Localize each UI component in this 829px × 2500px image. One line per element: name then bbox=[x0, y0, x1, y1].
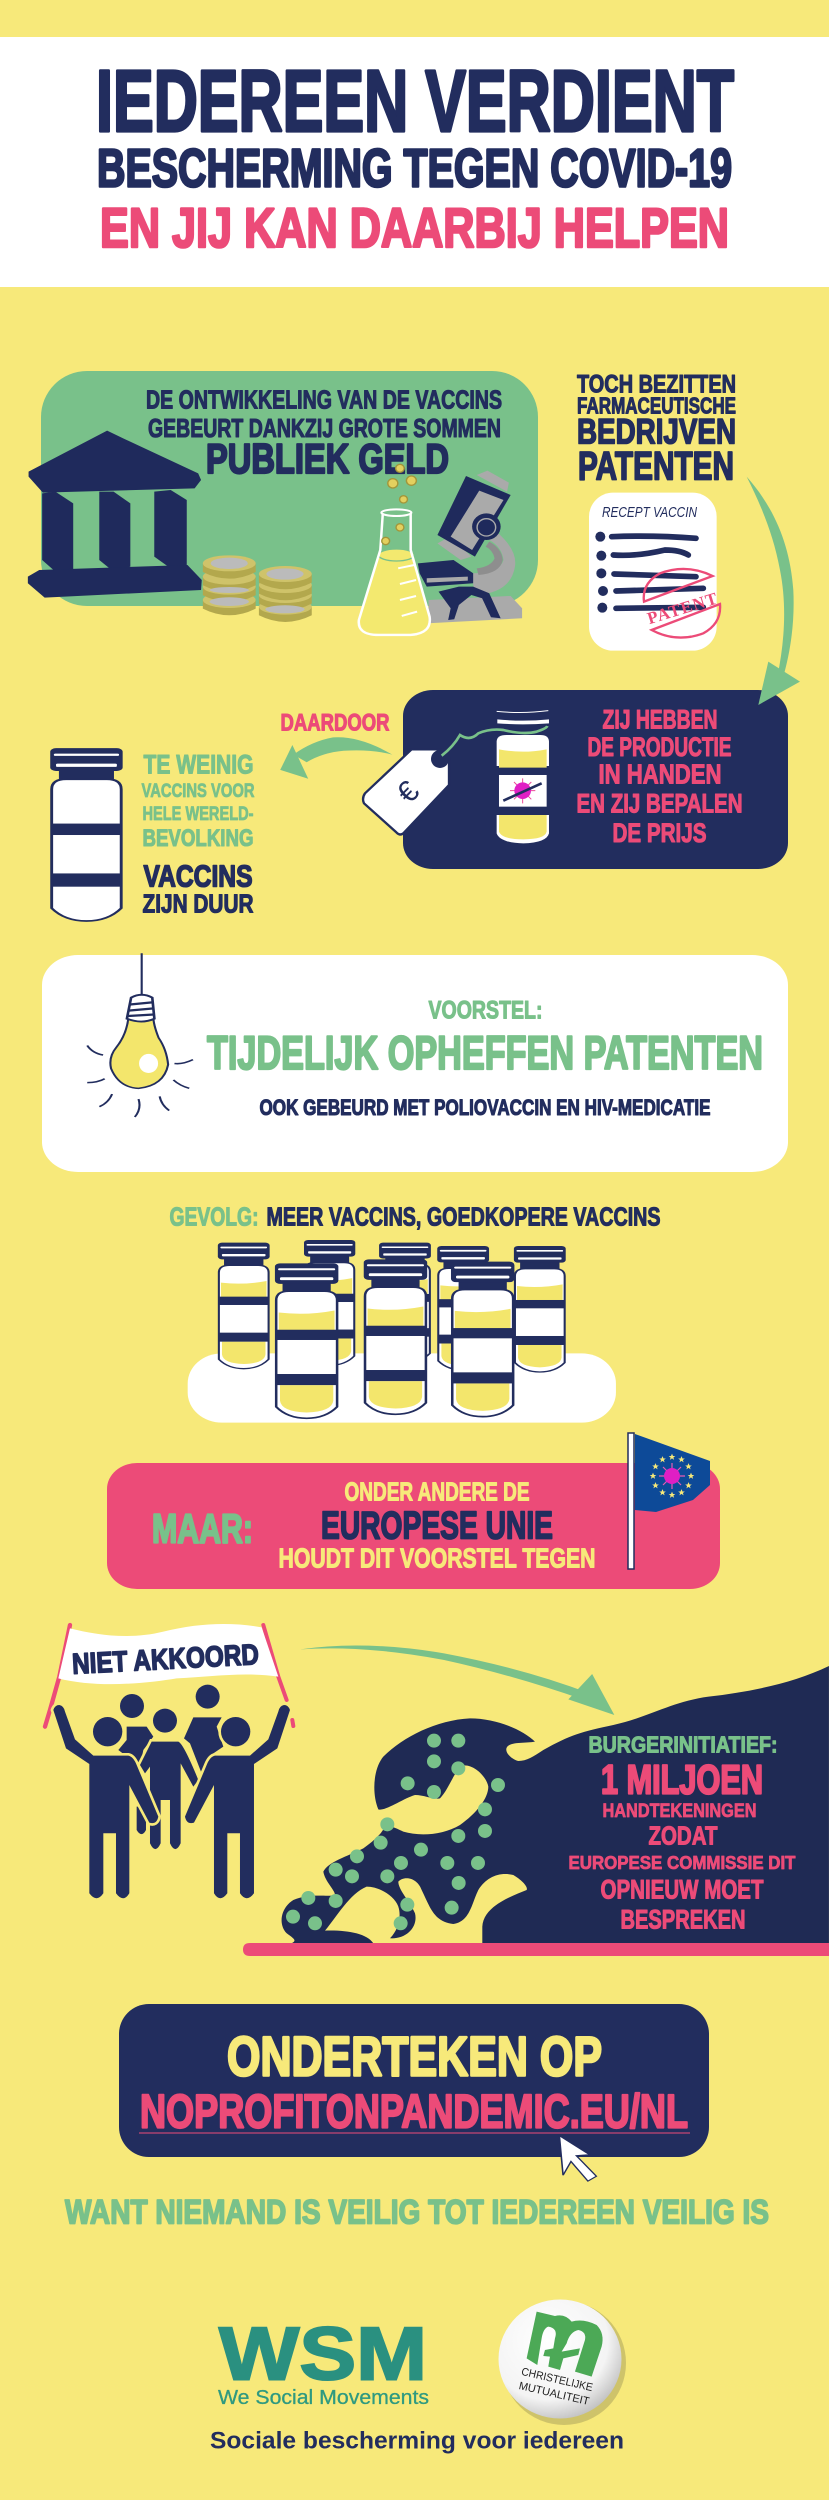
tagline: Sociale bescherming voor iedereen bbox=[210, 2428, 624, 2454]
icon: EU flag bbox=[628, 1433, 710, 1569]
icon: price tag bbox=[363, 726, 547, 835]
icon: protesters bbox=[53, 1685, 290, 1898]
text: citizens initiative bbox=[568, 1732, 796, 1934]
expensive line 2: ZIJN DUUR bbox=[142, 888, 254, 918]
proposal label: VOORSTEL: bbox=[428, 996, 542, 1024]
one million: 1 MILJOEN bbox=[601, 1756, 763, 1802]
panel line 3: IN HANDEN bbox=[598, 758, 722, 790]
icon: protest banner bbox=[45, 1624, 293, 1727]
again must: OPNIEUW MOET bbox=[600, 1874, 764, 1904]
panel line 4: EN ZIJ BEPALEN bbox=[576, 788, 742, 818]
text: too few vaccines bbox=[142, 750, 254, 918]
icon: coins bbox=[203, 555, 312, 622]
panel line 2: DE PRODUCTIE bbox=[588, 732, 732, 762]
WSM letters: WSM bbox=[219, 2312, 427, 2396]
panel: but the EU opposes bbox=[107, 1463, 720, 1589]
patents line 2: FARMACEUTISCHE bbox=[577, 392, 736, 418]
patents line 4: PATENTEN bbox=[578, 444, 734, 488]
icon: vial in panel bbox=[497, 711, 549, 843]
icon: mouse cursor bbox=[559, 2136, 596, 2181]
panel: production and price bbox=[403, 690, 788, 869]
patent stamp text: PATENT bbox=[645, 589, 720, 628]
patents line 1: TOCH BEZITTEN bbox=[577, 370, 736, 398]
icon: wave of signatures bbox=[282, 1666, 829, 1943]
badge text line 1: CHRISTELIJKE bbox=[520, 2366, 594, 2394]
expensive line 1: VACCINS bbox=[144, 858, 252, 894]
scarcity line 1: TE WEINIG bbox=[144, 750, 254, 780]
logo: Christelijke Mutualiteit badge bbox=[498, 2300, 626, 2425]
EU line 1: ONDER ANDERE DE bbox=[344, 1476, 530, 1506]
panel: sign call to action bbox=[119, 2004, 709, 2157]
panel: proposal bbox=[42, 955, 788, 1172]
ground bar bbox=[243, 1943, 829, 1956]
icon: bank building bbox=[28, 431, 202, 598]
badge text line 2: MUTUALITEIT bbox=[518, 2380, 591, 2408]
funding text line 2: GEBEURT DANKZIJ GROTE SOMMEN bbox=[148, 413, 501, 443]
panel: title band bbox=[0, 37, 829, 287]
text: companies hold patents bbox=[577, 370, 736, 488]
banner text: NIET AKKOORD bbox=[71, 1639, 260, 1681]
icon: microscope bbox=[418, 471, 522, 623]
so that: ZODAT bbox=[648, 1820, 718, 1850]
funding text line 1: DE ONTWIKKELING VAN DE VACCINS bbox=[146, 384, 502, 414]
consequence label: GEVOLG: bbox=[170, 1202, 258, 1232]
logo: WSM bbox=[218, 2312, 429, 2409]
scarcity line 2: VACCINS VOOR bbox=[142, 780, 254, 802]
euro sign: € bbox=[391, 775, 426, 810]
panel: public funding bbox=[41, 371, 538, 606]
icon: vaccine recipe card with patent stamp bbox=[589, 493, 720, 651]
consequence text: MEER VACCINS, GOEDKOPERE VACCINS bbox=[266, 1202, 660, 1232]
panel line 5: DE PRIJS bbox=[612, 818, 706, 848]
arrow: patents to production bbox=[747, 477, 800, 705]
arrow: to citizens initiative bbox=[300, 1645, 614, 1715]
icon: flask bbox=[359, 464, 430, 635]
sign heading: ONDERTEKEN OP bbox=[227, 2024, 602, 2088]
recipe title: RECEPT VACCIN bbox=[602, 505, 697, 521]
arrow: to too few vaccines bbox=[280, 737, 392, 779]
text: consequence bbox=[170, 1202, 660, 1232]
discuss: BESPREKEN bbox=[620, 1904, 746, 1934]
signatures: HANDTEKENINGEN bbox=[602, 1800, 756, 1822]
EU line 2: EUROPESE UNIE bbox=[321, 1504, 553, 1548]
proposal note: OOK GEBEURD MET POLIOVACCIN EN HIV-MEDICATIE bbox=[260, 1095, 710, 1120]
virus with slash bbox=[503, 778, 542, 803]
icon: light bulb bbox=[87, 953, 193, 1117]
patents line 3: BEDRIJVEN bbox=[577, 412, 736, 452]
funding text highlight: PUBLIEK GELD bbox=[206, 435, 449, 482]
scarcity line 3: HELE WERELD- bbox=[142, 803, 254, 825]
panel line 1: ZIJ HEBBEN bbox=[602, 704, 718, 734]
but label: MAAR: bbox=[152, 1506, 253, 1552]
WSM name: We Social Movements bbox=[218, 2387, 429, 2409]
commission: EUROPESE COMMISSIE DIT bbox=[568, 1852, 796, 1873]
initiative label: BURGERINITIATIEF: bbox=[588, 1732, 778, 1758]
label: daardoor: DAARDOOR bbox=[280, 710, 390, 736]
icon: large vial bbox=[50, 748, 123, 921]
EU line 3: HOUDT DIT VOORSTEL TEGEN bbox=[278, 1542, 596, 1574]
scarcity line 4: BEVOLKING bbox=[142, 825, 254, 852]
icon: group of vials on white pill bbox=[188, 1240, 616, 1423]
